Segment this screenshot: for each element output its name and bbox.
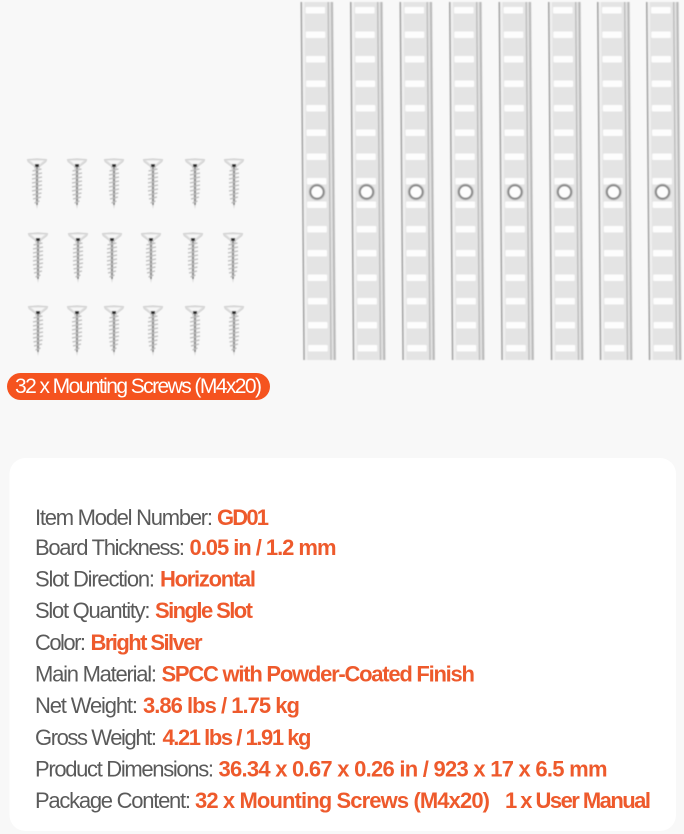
panel: specifications [10, 458, 676, 831]
spec: board thickness: Board Thickness: [35, 535, 185, 560]
spec: gross weight: 4.21 lbs / 1.91 kg [162, 725, 312, 750]
shelf rail: 5 [499, 2, 534, 360]
spec: main material: Main Material: [35, 662, 157, 686]
spec: gross weight: Gross Weight: [35, 725, 157, 750]
spec: gross weight [35, 725, 312, 750]
shelf rail: 7 [597, 2, 633, 360]
spec: slot direction: Horizontal [160, 566, 256, 592]
spec: item model number: Item Model Number: [35, 505, 213, 530]
shelf rail: 1 [301, 2, 336, 360]
spec: color: Bright Silver [90, 630, 203, 655]
spec: color: Color: [35, 630, 86, 655]
spec: product dimensions [35, 756, 608, 782]
spec: package content: 32 x Mounting Screws (M4x20) [195, 788, 490, 813]
spec: net weight [35, 693, 300, 718]
spec: color [35, 630, 203, 655]
spec: package content [35, 788, 651, 813]
shelf rail: 6 [548, 2, 584, 360]
spec: product dimensions: Product Dimensions: [35, 756, 214, 782]
spec: slot quantity [35, 598, 254, 623]
spec: main material: SPCC with Powder-Coated Finish [162, 662, 475, 686]
spec: net weight: Net Weight: [35, 693, 138, 718]
shelf rail: 2 [350, 2, 386, 360]
spec: item model number: GD01 [217, 505, 269, 530]
spec: net weight: 3.86 lbs / 1.75 kg [143, 693, 300, 718]
spec: slot direction [35, 566, 256, 592]
shelf rail: 8 [646, 2, 682, 360]
shelf rail: 4 [449, 2, 485, 360]
spec: slot quantity: Slot Quantity: [35, 598, 150, 623]
spec: slot direction: Slot Direction: [35, 566, 155, 592]
callout: screws label pill: 32 x Mounting Screws (M4x20) [15, 375, 262, 398]
spec: board thickness: 0.05 in / 1.2 mm [190, 535, 336, 560]
spec: package content: Package Content: [35, 788, 191, 813]
shelf rail: 3 [400, 2, 435, 360]
spec: board thickness [35, 535, 336, 560]
spec: product dimensions: 36.34 x 0.67 x 0.26 in / 923 x 17 x 6.5 mm [218, 756, 608, 782]
mounting screws group [27, 159, 244, 356]
spec: slot quantity: Single Slot [155, 598, 254, 623]
spec: package content: 1 x User Manual [505, 788, 651, 813]
